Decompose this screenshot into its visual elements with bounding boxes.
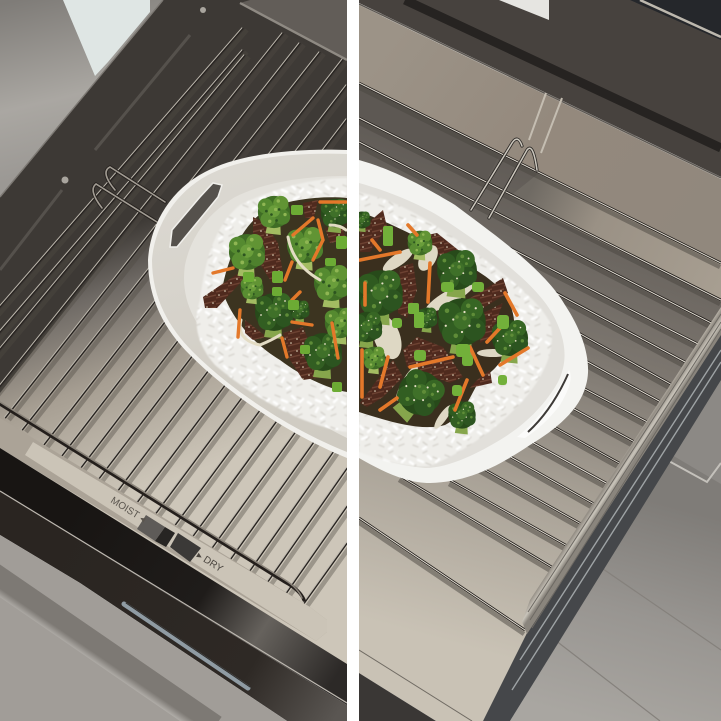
rack wire shadows <box>358 87 720 634</box>
rail grooves <box>528 314 721 628</box>
rear ledge <box>509 173 721 300</box>
rear shadow strip <box>359 83 500 182</box>
wall rim highlight <box>0 0 163 197</box>
wood floor, lower right <box>510 378 721 721</box>
rack wires <box>0 28 347 606</box>
drawer left wall <box>0 0 347 393</box>
green onion <box>243 205 347 392</box>
plank seams <box>555 560 721 721</box>
dark oven underside <box>359 0 721 177</box>
rear floor reflection <box>240 0 347 60</box>
panel: left half, drawer viewed from the front <box>0 0 355 721</box>
door handle line <box>667 460 721 482</box>
dish inner well <box>359 183 565 468</box>
white dish edge, left half <box>148 150 347 458</box>
drawer floor, lit part <box>0 225 347 664</box>
door panel, right edge <box>672 378 721 484</box>
wood floor, upper left <box>0 0 163 197</box>
stir-fry, right half <box>352 210 528 434</box>
floor, lower left <box>0 535 287 721</box>
rack front bar <box>0 402 304 600</box>
lower side rail <box>483 333 721 721</box>
broccoli <box>357 270 403 325</box>
rack wire shadows <box>0 266 347 606</box>
food base <box>359 212 514 427</box>
rice, right half <box>359 192 552 466</box>
rack side handles <box>93 167 165 222</box>
lower rail highlight <box>512 350 721 690</box>
food base <box>222 197 347 392</box>
front crease line <box>359 650 472 721</box>
drawer front lip <box>0 444 327 641</box>
rice, left half <box>196 178 347 432</box>
lower black band <box>0 491 347 721</box>
recessed pull <box>124 603 250 688</box>
panel: right half, drawer viewed from the side <box>352 0 721 721</box>
white cabinet panel, upper left <box>63 0 150 76</box>
green onion <box>383 226 509 396</box>
rack wires <box>359 83 721 630</box>
carrots <box>360 225 528 410</box>
wire reflections on wall <box>529 93 562 153</box>
drawer floor <box>359 83 721 721</box>
rear wall <box>359 5 721 265</box>
label: dry: ▸ DRY <box>194 550 225 575</box>
stir-fry, left half <box>203 196 355 392</box>
humidity slider <box>137 515 201 562</box>
black drawer front, bottom <box>359 673 436 721</box>
top rim of wall <box>359 4 721 178</box>
dish body, left half <box>152 154 347 452</box>
rack handles <box>471 139 537 218</box>
dish handle slot <box>170 183 222 247</box>
white label tag <box>499 0 549 20</box>
dish inner well <box>184 176 347 438</box>
label: moist: MOIST ◂ <box>108 495 148 525</box>
black drawer front <box>0 448 347 705</box>
thin trim line <box>0 491 347 703</box>
dish handle slit <box>528 374 568 432</box>
carrots <box>213 202 346 358</box>
black cabinet, top right <box>630 0 721 40</box>
lip raised plate <box>25 442 327 641</box>
white dish, right half <box>359 160 588 483</box>
beef <box>360 210 508 407</box>
wall reflection lines <box>0 35 190 270</box>
onion <box>367 242 509 431</box>
dish handle opening <box>517 370 571 438</box>
wall bolts <box>62 7 206 184</box>
broccoli <box>229 234 265 278</box>
beef <box>203 200 346 380</box>
trim highlight, top right <box>640 0 721 37</box>
dark recess stripe <box>405 0 721 148</box>
silver rail <box>522 307 721 634</box>
onion <box>240 225 346 345</box>
handle tube <box>0 574 214 721</box>
rack back bar <box>240 3 347 60</box>
